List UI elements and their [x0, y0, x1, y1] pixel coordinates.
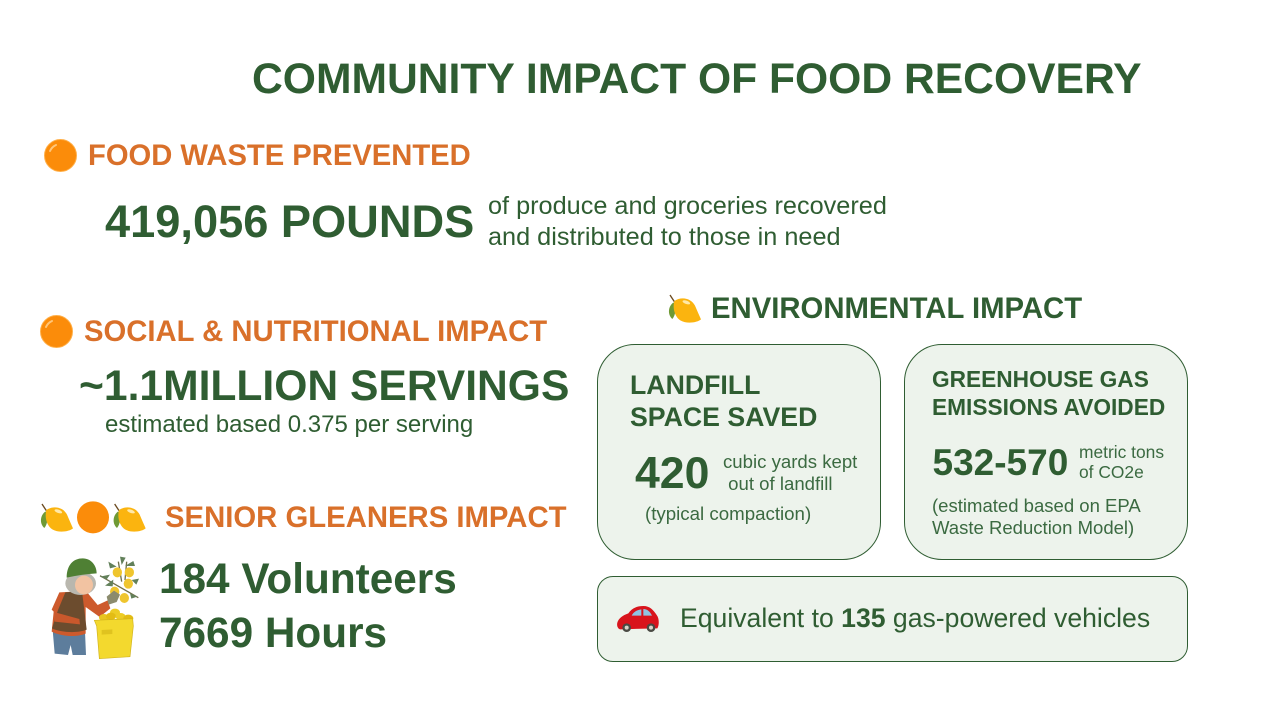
shirt and arms — [52, 591, 110, 636]
branch and leaves — [100, 562, 138, 598]
note: serving estimate: estimated based 0.375 per serving — [105, 410, 473, 438]
text: vehicles: Equivalent to 135 gas-powered vehicles — [680, 603, 1150, 633]
face — [75, 576, 93, 594]
heading: social and nutritional impact: SOCIAL & NUTRITIONAL IMPACT — [84, 316, 547, 348]
note: EPA model: (estimated based on EPA — [932, 495, 1141, 516]
description: pounds recovered: of produce and groceries recovered — [488, 192, 887, 220]
description: cubic yards: cubic yards kept — [723, 451, 857, 472]
description: metric tons: metric tons — [1079, 442, 1164, 462]
description: pounds recovered — [488, 192, 887, 251]
jeans — [53, 630, 86, 655]
card heading: greenhouse gas: GREENHOUSE GAS — [932, 366, 1149, 392]
description: pounds recovered: and distributed to those in need — [488, 223, 841, 251]
glove — [107, 591, 120, 605]
icon: lemon — [668, 294, 701, 323]
hat — [67, 558, 97, 578]
icon: orange — [44, 139, 77, 172]
panel: food waste prevented — [44, 139, 887, 251]
stat: hours: 7669 Hours — [159, 609, 387, 656]
title: COMMUNITY IMPACT OF FOOD RECOVERY — [252, 55, 1142, 103]
big number: pounds: 419,056 POUNDS — [105, 196, 474, 247]
vest — [52, 591, 87, 632]
card: vehicles equivalent — [597, 576, 1188, 662]
description: cubic yards: out of landfill — [728, 473, 833, 494]
crate — [94, 619, 133, 659]
card heading: landfill: SPACE SAVED — [630, 402, 817, 432]
forearm and hand — [55, 612, 80, 624]
illustration: gleaner picking lemons — [52, 556, 139, 659]
card heading: landfill: LANDFILL — [630, 370, 760, 400]
heading: senior gleaners impact: SENIOR GLEANERS IMPACT — [165, 501, 567, 534]
stat: volunteers: 184 Volunteers — [159, 555, 457, 602]
note: EPA model — [932, 495, 1141, 538]
panel: social and nutritional impact — [40, 315, 569, 438]
card heading: greenhouse gas — [932, 366, 1165, 420]
heading: food waste prevented: FOOD WASTE PREVENTED — [88, 140, 471, 172]
description: metric tons: of CO2e — [1079, 462, 1144, 482]
panel: environmental impact — [597, 292, 1188, 662]
icon: lemon, orange, lemon — [40, 501, 146, 534]
card: greenhouse gas emissions avoided — [904, 344, 1188, 560]
description: cubic yards — [723, 451, 858, 494]
icon: orange — [40, 315, 73, 348]
note: EPA model: Waste Reduction Model) — [932, 517, 1134, 538]
note: typical compaction: (typical compaction) — [645, 503, 811, 524]
card heading: landfill — [630, 370, 817, 432]
icon: red car — [617, 606, 659, 632]
number: 532-570: 532-570 — [932, 442, 1068, 483]
description: metric tons — [1079, 442, 1164, 482]
panel: senior gleaners impact — [40, 501, 567, 659]
card: landfill space saved — [597, 344, 881, 560]
heading: environmental impact: ENVIRONMENTAL IMPACT — [711, 292, 1082, 325]
hair — [65, 572, 96, 595]
number: 420: 420 — [635, 449, 709, 498]
big number: servings: ~1.1MILLION SERVINGS — [79, 362, 569, 410]
crate lemons — [99, 614, 109, 621]
card heading: greenhouse gas: EMISSIONS AVOIDED — [932, 394, 1165, 420]
